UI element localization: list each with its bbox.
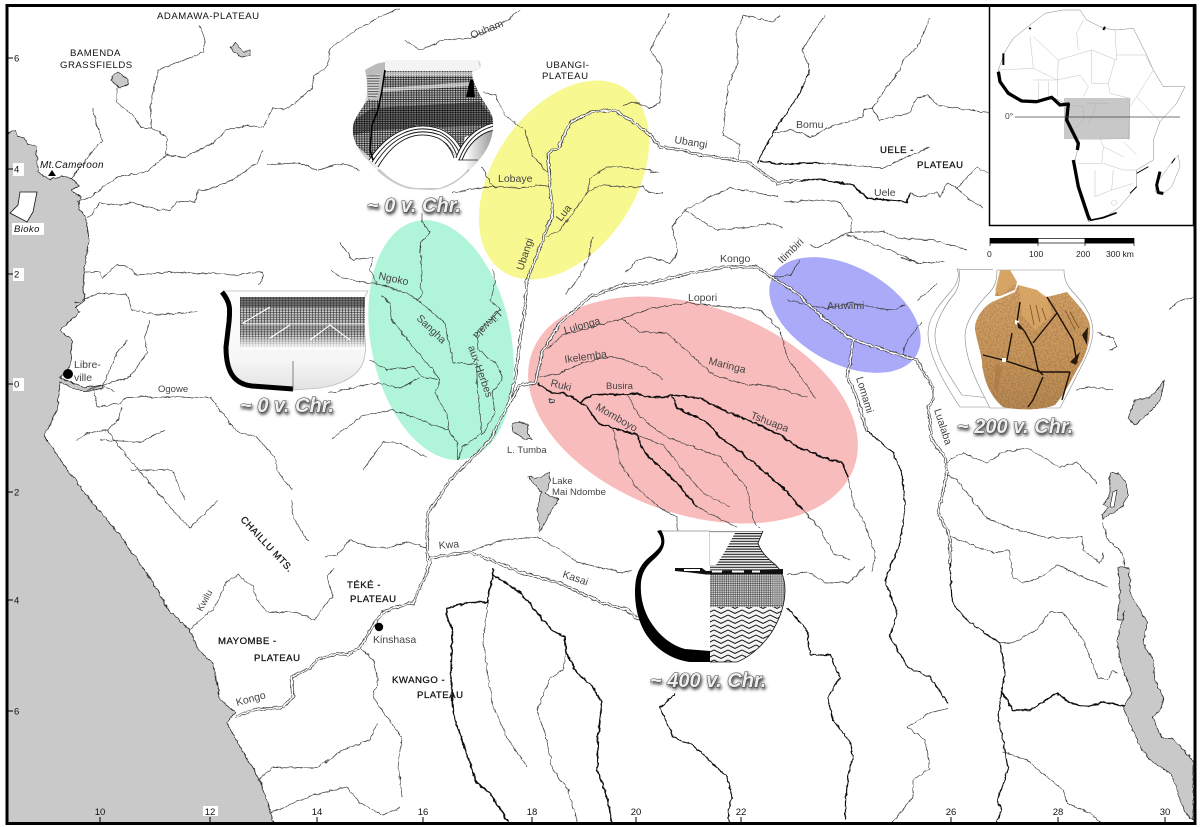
scale bar: 300 km <box>1106 249 1134 259</box>
label: Ouham: Ouham <box>469 18 505 42</box>
label: Uele Plateau: PLATEAU <box>917 160 964 171</box>
pot 2: profile vessel, about 0 v. Chr. <box>222 291 368 390</box>
label: Lake Mai Ndombe: Mai Ndombe <box>552 487 606 498</box>
label: Ruki: Ruki <box>549 377 573 394</box>
bottom longitude axis: 10 <box>95 807 105 818</box>
label: Lualaba: Lualaba <box>931 407 954 447</box>
label: Itimbiri: Itimbiri <box>776 236 806 266</box>
region: Aruwimi (blue ellipse) <box>750 233 940 397</box>
date label: pot 2: ~ 0 v. Chr. <box>240 395 334 417</box>
label: Teke Plateau: TÉKÉ - <box>347 580 381 591</box>
island: Bioko <box>10 192 37 222</box>
label: Busira: Busira <box>606 381 634 392</box>
river labels <box>158 18 954 709</box>
label: Teke Plateau: PLATEAU <box>350 594 397 605</box>
bottom longitude axis: 18 <box>527 807 537 818</box>
bottom longitude axis: 30 <box>1160 807 1170 818</box>
label: Lomami: Lomami <box>853 375 876 415</box>
left latitude axis: 0 <box>14 380 19 390</box>
inset: study area rectangle <box>1064 98 1130 139</box>
scale bar <box>987 238 1134 259</box>
label: Lua: Lua <box>554 203 574 224</box>
label: Lopori: Lopori <box>688 292 717 304</box>
label: Mayombe Plateau: PLATEAU <box>254 653 301 664</box>
region labels <box>60 11 964 701</box>
scale bar: 200 <box>1076 249 1090 259</box>
pot 1: decorated vessel, about 0 v. Chr. <box>350 60 494 190</box>
date label: pot 4: ~ 200 v. Chr. <box>957 416 1073 438</box>
inset: Africa outline and borders <box>998 10 1185 222</box>
bottom longitude axis: 14 <box>312 807 322 818</box>
label: L. Tumba: L. Tumba <box>507 445 547 456</box>
inset: equator line <box>1015 116 1180 118</box>
label: Momboyo: Momboyo <box>594 401 640 435</box>
label: Adamawa Plateau: ADAMAWA-PLATEAU <box>157 11 260 22</box>
label: Lobaye: Lobaye <box>498 173 533 185</box>
label: Mt. Cameroon: Mt.Cameroon <box>40 160 104 171</box>
label: Ngoko: Ngoko <box>377 270 410 288</box>
left latitude axis: 6 <box>14 706 19 718</box>
icon: Mt. Cameroon triangle <box>48 170 56 176</box>
label: Bamenda Grassfields: BAMENDA <box>70 48 121 59</box>
left latitude axis <box>8 51 24 718</box>
left latitude axis: 6 <box>14 54 19 64</box>
bottom longitude axis: 26 <box>946 807 956 818</box>
label: Kwilu: Kwilu <box>195 588 215 613</box>
bottom longitude axis: 22 <box>736 807 746 818</box>
label: Ubangi east: Ubangi <box>674 134 708 151</box>
double-line main rivers <box>235 110 800 717</box>
label: Kwango Plateau: PLATEAU <box>417 690 464 701</box>
label: Uele: Uele <box>874 187 896 199</box>
label: Mayombe Plateau: MAYOMBE - <box>218 636 277 647</box>
scale bar: 100 <box>1029 249 1043 259</box>
bottom longitude axis: 28 <box>1053 807 1063 818</box>
label: Kongo north: Kongo <box>720 253 751 265</box>
ocean <box>4 130 275 826</box>
label: Ubangi Plateau: UBANGI- <box>546 60 589 71</box>
left latitude axis: 2 <box>14 270 19 280</box>
left latitude axis: 4 <box>14 164 19 176</box>
label: Aruwimi: Aruwimi <box>827 300 864 312</box>
label: Ikelemba: Ikelemba <box>564 348 608 366</box>
marker: Libreville <box>63 369 73 379</box>
label: Kongo west: Kongo <box>235 689 267 709</box>
pot 4: reconstructed sherd vessel, about 200 v. Chr. <box>928 269 1093 409</box>
scale bar: 0 <box>987 249 992 259</box>
bottom longitude axis: 12 <box>205 807 215 818</box>
label: Bioko: Bioko <box>14 224 40 235</box>
label: Libreville: Libre- <box>74 359 101 371</box>
label: Ubangi Plateau: PLATEAU <box>542 71 589 82</box>
label: Lulonga: Lulonga <box>563 315 602 337</box>
island in Lake Kivu <box>1110 490 1117 507</box>
region: Ruki-Tshuapa (red ellipse) <box>497 255 889 565</box>
bottom longitude axis <box>95 806 1170 822</box>
label: Maringa: Maringa <box>707 355 747 376</box>
bottom longitude axis: 16 <box>418 807 428 818</box>
label: aux-Herbes: aux-Herbes <box>465 344 495 399</box>
marker: Kinshasa <box>375 623 383 631</box>
label: Libreville: ville <box>74 372 92 384</box>
label: Kinshasa: Kinshasa <box>373 634 416 646</box>
label: Lake Mai Ndombe: Lake <box>552 476 573 487</box>
label: Uele Plateau: UELE - <box>880 145 914 156</box>
label: Tshuapa: Tshuapa <box>749 410 790 435</box>
label: Ubangi south: Ubangi <box>514 237 536 272</box>
label: Kwa: Kwa <box>438 538 460 552</box>
date label: pot 3: ~ 400 v. Chr. <box>650 670 766 692</box>
label: Ogowe: Ogowe <box>158 384 188 395</box>
label: Chaillu Mts: CHAILLU MTS. <box>238 515 295 575</box>
place markers and labels <box>12 160 606 646</box>
label: Kasai: Kasai <box>561 568 590 588</box>
bottom longitude axis: 20 <box>631 807 641 818</box>
pot 3: profile and herringbone vessel, about 400 v. Chr. <box>635 530 794 667</box>
label: Bomu: Bomu <box>796 119 824 131</box>
label: Likwala: Likwala <box>470 308 503 342</box>
date label: pot 1: ~ 0 v. Chr. <box>367 195 461 217</box>
inset: Africa locator map <box>990 6 1194 226</box>
inset: equator label: 0° <box>1005 111 1013 121</box>
label: Kwango Plateau: KWANGO - <box>392 675 445 686</box>
region: Sangha (green ellipse) <box>348 207 534 473</box>
left latitude axis: 4 <box>14 596 19 606</box>
label: Bamenda Grassfields: GRASSFIELDS <box>60 60 133 71</box>
left latitude axis: 2 <box>14 488 19 498</box>
label: Sangha: Sangha <box>414 313 448 346</box>
region: Ubangi (yellow ellipse) <box>444 49 684 311</box>
